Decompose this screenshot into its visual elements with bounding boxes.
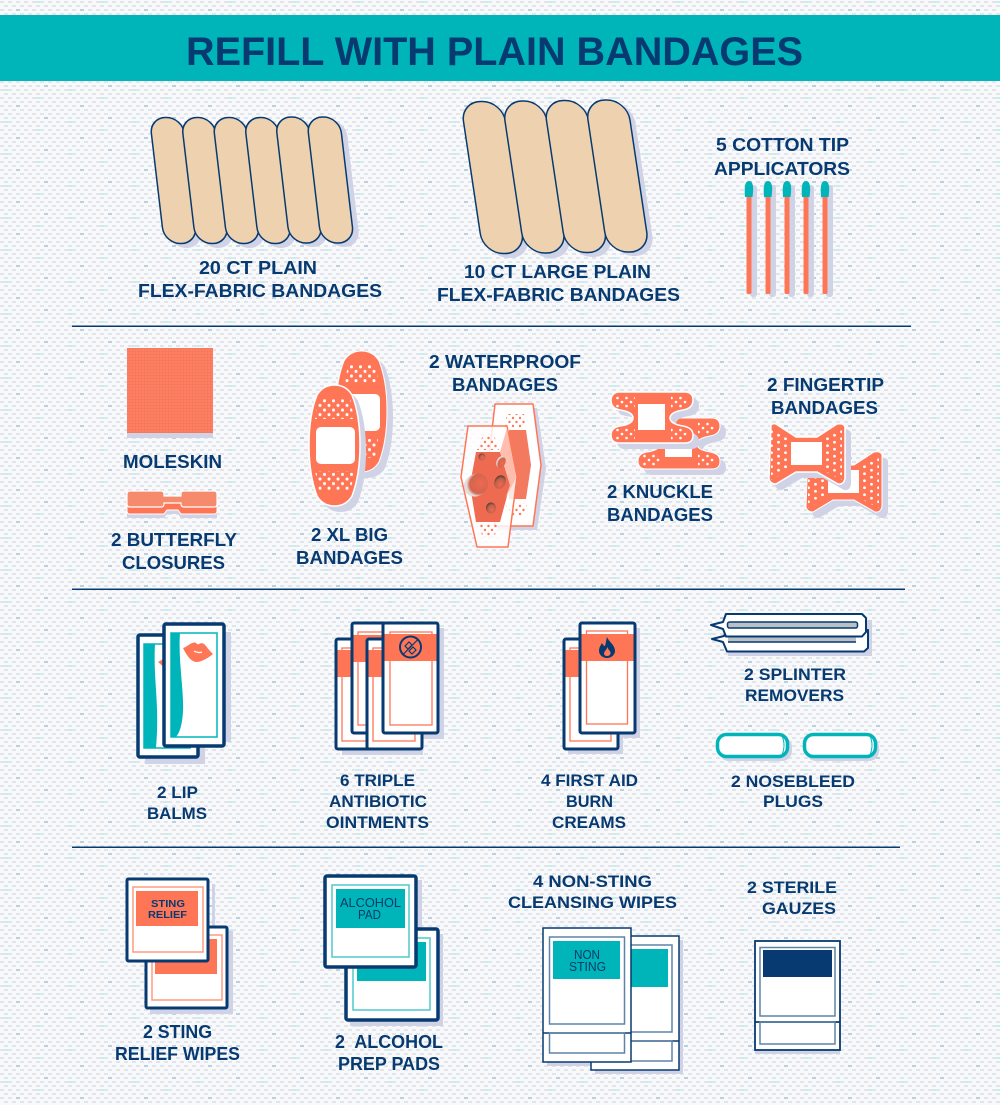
label: waterproof bandages (429, 351, 581, 395)
label: sting relief wipes (115, 1021, 240, 1064)
icon: 20 ct flex-fabric bandages (150, 117, 360, 248)
icon: splinter removers (711, 614, 872, 656)
icon: cotton tip applicators (745, 181, 833, 297)
icon: waterproof bandages (459, 404, 546, 547)
label: fingertip bandages: BANDAGES (771, 397, 878, 418)
title: REFILL WITH PLAIN BANDAGES (186, 30, 803, 74)
icon: 10 ct large bandages (460, 100, 655, 258)
label: 20 ct (138, 257, 382, 301)
label: waterproof bandages: 2 WATERPROOF (429, 351, 581, 372)
divider 3 (72, 846, 900, 848)
icon: alcohol prep pads (325, 876, 443, 1026)
label: 10 ct: 10 CT LARGE PLAIN (464, 261, 651, 282)
icon: sterile gauzes (755, 941, 840, 1054)
label: alcohol prep pads: PREP PADS (338, 1053, 440, 1074)
label: first aid burn creams: 4 FIRST AID (541, 771, 638, 790)
label: 10 ct (437, 261, 680, 305)
label: triple antibiotic ointments (326, 771, 429, 832)
panel: plain bandages row (138, 100, 850, 305)
label: knuckle bandages (607, 481, 713, 525)
label: nosebleed plugs: PLUGS (763, 792, 823, 811)
label: butterfly closures: CLOSURES (122, 552, 225, 573)
label: splinter removers: 2 SPLINTER (744, 665, 846, 684)
icon: nosebleed plugs (718, 734, 879, 761)
label: lip balms: 2 LIP (157, 783, 198, 802)
label: knuckle bandages: BANDAGES (607, 504, 713, 525)
icon: sting relief wipes: STING (151, 898, 185, 910)
label: lip balms: BALMS (147, 804, 207, 823)
label: alcohol prep pads: 2 ALCOHOL (335, 1031, 443, 1052)
icon: non-sting cleansing wipes (543, 928, 683, 1074)
label: sterile gauzes (747, 878, 837, 918)
label: first aid burn creams (541, 771, 638, 832)
label: triple antibiotic ointments: OINTMENTS (326, 813, 429, 832)
label: butterfly closures: 2 BUTTERFLY (111, 529, 238, 550)
label: triple antibiotic ointments: 6 TRIPLE (340, 771, 415, 790)
icon: non-sting cleansing wipes: NON (574, 948, 600, 962)
label: splinter removers: REMOVERS (745, 686, 844, 705)
icon: first aid burn creams (564, 623, 640, 754)
label: lip balms (147, 783, 207, 823)
label: fingertip bandages (767, 374, 884, 418)
icon: alcohol prep pads: ALCOHOL (340, 895, 401, 910)
icon: alcohol prep pads: PAD (358, 907, 381, 922)
icon: lip balms (138, 624, 231, 764)
icon: moleskin (127, 348, 213, 438)
panel: ointments row (138, 614, 879, 832)
label: nosebleed plugs: 2 NOSEBLEED (731, 772, 855, 791)
icon: sting relief wipes: RELIEF (148, 909, 188, 921)
label: non-sting cleansing wipes: CLEANSING WIPES (508, 893, 677, 912)
icon: butterfly closures (127, 491, 217, 518)
label: first aid burn creams: CREAMS (552, 813, 626, 832)
icon: fingertip bandages (769, 424, 888, 518)
label: non-sting cleansing wipes: 4 NON-STING (533, 872, 652, 891)
label: first aid burn creams: BURN (566, 792, 613, 811)
label: butterfly closures (111, 529, 238, 573)
label: XL big bandages: 2 XL BIG (311, 524, 388, 545)
header banner (0, 15, 1000, 81)
divider 2 (72, 588, 905, 590)
icon: sting relief wipes (127, 879, 233, 1014)
label: 20 ct: FLEX-FABRIC BANDAGES (138, 280, 382, 301)
label: sting relief wipes: 2 STING (143, 1021, 212, 1042)
label: non-sting cleansing wipes (508, 872, 677, 912)
label: knuckle bandages: 2 KNUCKLE (607, 481, 713, 502)
label: splinter removers (744, 665, 846, 705)
label: XL big bandages: BANDAGES (296, 547, 403, 568)
label: cotton tip applicators (714, 134, 850, 179)
label: nosebleed plugs (731, 772, 855, 811)
icon: knuckle bandages (611, 392, 726, 475)
label: triple antibiotic ointments: ANTIBIOTIC (329, 792, 427, 811)
label: cotton tip applicators: 5 COTTON TIP (716, 134, 849, 155)
label: sterile gauzes: 2 STERILE (747, 878, 837, 897)
label: alcohol prep pads (335, 1031, 443, 1074)
label: cotton tip applicators: APPLICATORS (714, 158, 850, 179)
label: sterile gauzes: GAUZES (762, 899, 836, 918)
label: fingertip bandages: 2 FINGERTIP (767, 374, 884, 395)
panel: wipes row (115, 872, 840, 1074)
icon: triple antibiotic ointments (336, 623, 444, 755)
label: waterproof bandages: BANDAGES (452, 374, 558, 395)
icon: XL big bandages (309, 351, 393, 512)
label: XL big bandages (296, 524, 403, 568)
label: sting relief wipes: RELIEF WIPES (115, 1043, 240, 1064)
label: 20 ct: 20 CT PLAIN (199, 257, 317, 278)
icon: non-sting cleansing wipes: STING (569, 960, 606, 974)
divider 1 (72, 326, 911, 327)
label: moleskin: MOLESKIN (123, 451, 222, 472)
panel: specialty bandages row (111, 348, 888, 573)
label: 10 ct: FLEX-FABRIC BANDAGES (437, 284, 680, 305)
